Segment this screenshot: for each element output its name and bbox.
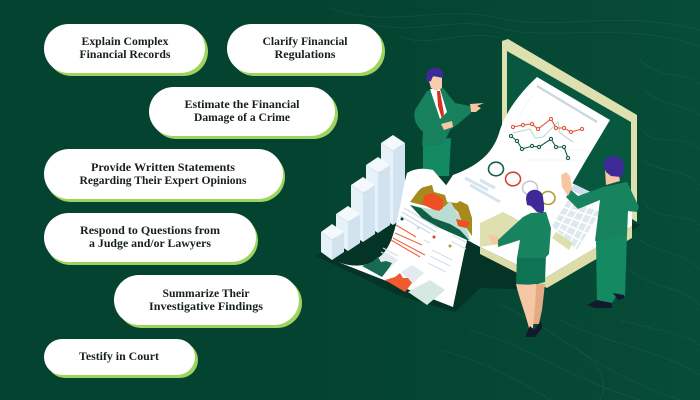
ground shadow [316,175,640,312]
pill: Clarify Financial Regulations [227,24,385,76]
laptop screen [502,39,637,222]
line chart series [509,117,584,160]
keyboard keys [552,200,600,250]
pill: Testify in Court [44,339,198,378]
bar chart: rising isometric columns [321,135,405,260]
mini chart: orange [401,265,424,284]
pill: Clarify Financial Regulations: Clarify Financial [262,35,348,48]
pill: Respond to Questions from a Judge and/or Lawyers: Respond to Questions from [80,224,220,237]
curled report page with line chart [443,77,610,210]
pill: Estimate the Financial Damage of a Crime: Damage of a Crime [194,111,290,124]
woman [488,190,551,337]
pill: Testify in Court: Testify in Court [79,350,159,363]
pill: Estimate the Financial Damage of a Crime [149,87,338,139]
mini chart: teal [378,252,398,268]
pill: Summarize Their Investigative Findings: Investigative Findings [149,300,263,313]
donut gauges [488,162,555,204]
pill: Respond to Questions from a Judge and/or Lawyers: a Judge and/or Lawyers [89,237,211,250]
mini chart: pale table [408,280,445,305]
presenter man [414,67,484,176]
pill: Explain Complex Financial Records: Financial Records [80,48,171,61]
pill: Summarize Their Investigative Findings: Summarize Their [162,287,250,300]
report text lines [400,208,438,233]
pill: Provide Written Statements Regarding Their Expert Opinions: Regarding Their Expert Opinions [80,174,247,187]
pill: Estimate the Financial Damage of a Crime: Estimate the Financial [184,98,300,111]
pill: Explain Complex Financial Records: Explain Complex [82,35,169,48]
pill: Provide Written Statements Regarding Their Expert Opinions: Provide Written Statements [91,161,235,174]
pill: Summarize Their Investigative Findings [114,275,302,328]
pill: Explain Complex Financial Records [44,24,208,76]
pill: Clarify Financial Regulations: Regulations [274,48,336,61]
front report page with area charts [338,169,472,307]
laptop base with keyboard [440,175,632,288]
pill: Respond to Questions from a Judge and/or Lawyers [44,213,258,265]
standing man from behind [561,156,639,308]
pill: Provide Written Statements Regarding Their Expert Opinions [44,149,285,202]
